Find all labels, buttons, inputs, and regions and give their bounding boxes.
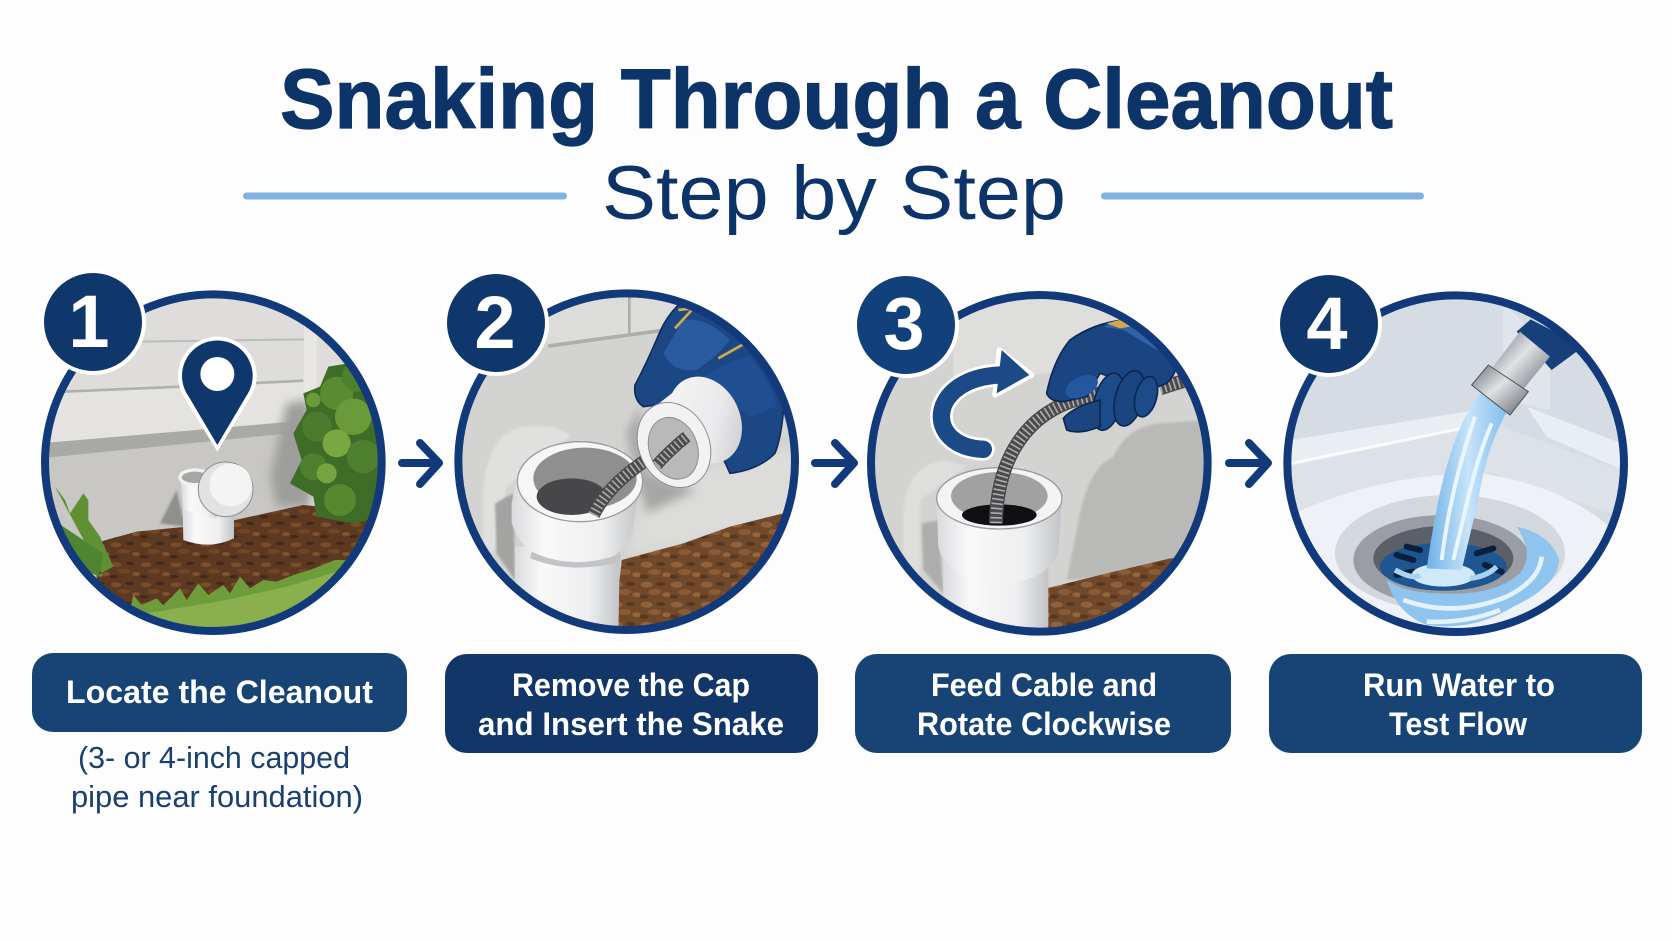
pipe shadow (160, 490, 185, 527)
pipe ghost (903, 460, 967, 580)
wall top (954, 299, 1118, 377)
pipe body (183, 507, 234, 545)
label: step 1 (32, 653, 407, 732)
panel: step 2 illustration (453, 290, 800, 637)
grass light (148, 572, 336, 627)
frame (45, 294, 382, 631)
wall shadow (627, 407, 697, 513)
water stream (1427, 392, 1510, 570)
badge: number 4 (1278, 273, 1380, 375)
note: step 1 detail: pipe near foundation) (71, 779, 363, 814)
arrow: step 2 to 3 (815, 443, 854, 484)
label: step 4: Test Flow (1389, 706, 1527, 742)
pipe collar (937, 505, 1062, 580)
badge: number 3: 3 (883, 282, 925, 365)
grass (131, 560, 346, 614)
sink back ledge (1290, 410, 1497, 467)
pipe ghost (483, 426, 570, 553)
icon: rotation arrow (941, 350, 1032, 449)
frame (458, 293, 795, 630)
pipe opening (937, 468, 1062, 529)
shrub shadow (270, 400, 310, 507)
wall corner (1503, 303, 1550, 410)
subtitle with rules: Step by Step (602, 151, 1066, 236)
siding boards (64, 326, 316, 393)
label: step 3: Feed Cable and (931, 667, 1157, 703)
badge: number 1 (42, 271, 144, 373)
label: step 4: Run Water to (1363, 667, 1555, 703)
panel: step 4 illustration (1283, 290, 1630, 637)
subtitle with rules (243, 151, 1424, 236)
hose (1517, 319, 1583, 370)
icon: location pin (178, 337, 257, 452)
foundation wall (49, 422, 306, 540)
water swirl (1387, 527, 1559, 626)
brick course (547, 298, 676, 348)
pipe collar (181, 482, 217, 518)
badge: number 3 (855, 274, 957, 376)
frame (871, 295, 1208, 632)
fern (53, 483, 113, 577)
faucet tube (1492, 332, 1550, 393)
cable (588, 456, 646, 518)
frame (1287, 295, 1624, 632)
badge: number 1: 1 (68, 280, 110, 363)
title: Snaking Through a Cleanout (280, 52, 1393, 146)
glove (1047, 320, 1177, 434)
wall shadow (1067, 420, 1207, 580)
basin bowl (1287, 473, 1630, 637)
arrow: step 3 to 4 (1229, 443, 1268, 484)
label: step 2: and Insert the Snake (478, 706, 784, 742)
glove (635, 305, 784, 473)
drain (1380, 543, 1507, 591)
note: step 1 detail: (3- or 4-inch capped (78, 740, 350, 775)
label: step 2: Remove the Cap (512, 667, 750, 703)
pipe body (515, 546, 620, 626)
cap in hand (636, 376, 742, 488)
mulch (618, 514, 782, 626)
label: step 3 (855, 654, 1231, 753)
shrub (290, 364, 378, 524)
basin recess (1335, 495, 1565, 612)
cuff stripes (675, 308, 745, 358)
badge: number 4: 4 (1306, 282, 1348, 365)
note: step 1 detail (71, 740, 363, 814)
glove cuff (1104, 324, 1158, 350)
pipe body (943, 560, 1048, 628)
badge: number 2: 2 (474, 281, 516, 364)
drain ring (1353, 515, 1530, 605)
label: step 2 (445, 654, 818, 753)
foundation band (49, 422, 286, 458)
mulch (1048, 558, 1174, 628)
cap (198, 462, 253, 517)
badge: number 2 (445, 272, 547, 374)
label: step 3: Rotate Clockwise (917, 706, 1171, 742)
label: step 4 (1269, 654, 1642, 753)
panel: step 3 illustration (867, 290, 1213, 637)
panel: step 1 illustration (40, 290, 387, 637)
basin slope (1287, 423, 1630, 520)
cable (996, 380, 1187, 523)
wall highlight (639, 456, 790, 544)
mulch bed (96, 505, 367, 605)
pipe opening (517, 442, 643, 522)
arrow: step 1 to 2 (402, 443, 439, 484)
drain throat (1373, 526, 1513, 591)
label: step 1: Locate the Cleanout (66, 674, 373, 710)
pipe collar (512, 483, 637, 560)
faucet ring (1472, 365, 1528, 415)
